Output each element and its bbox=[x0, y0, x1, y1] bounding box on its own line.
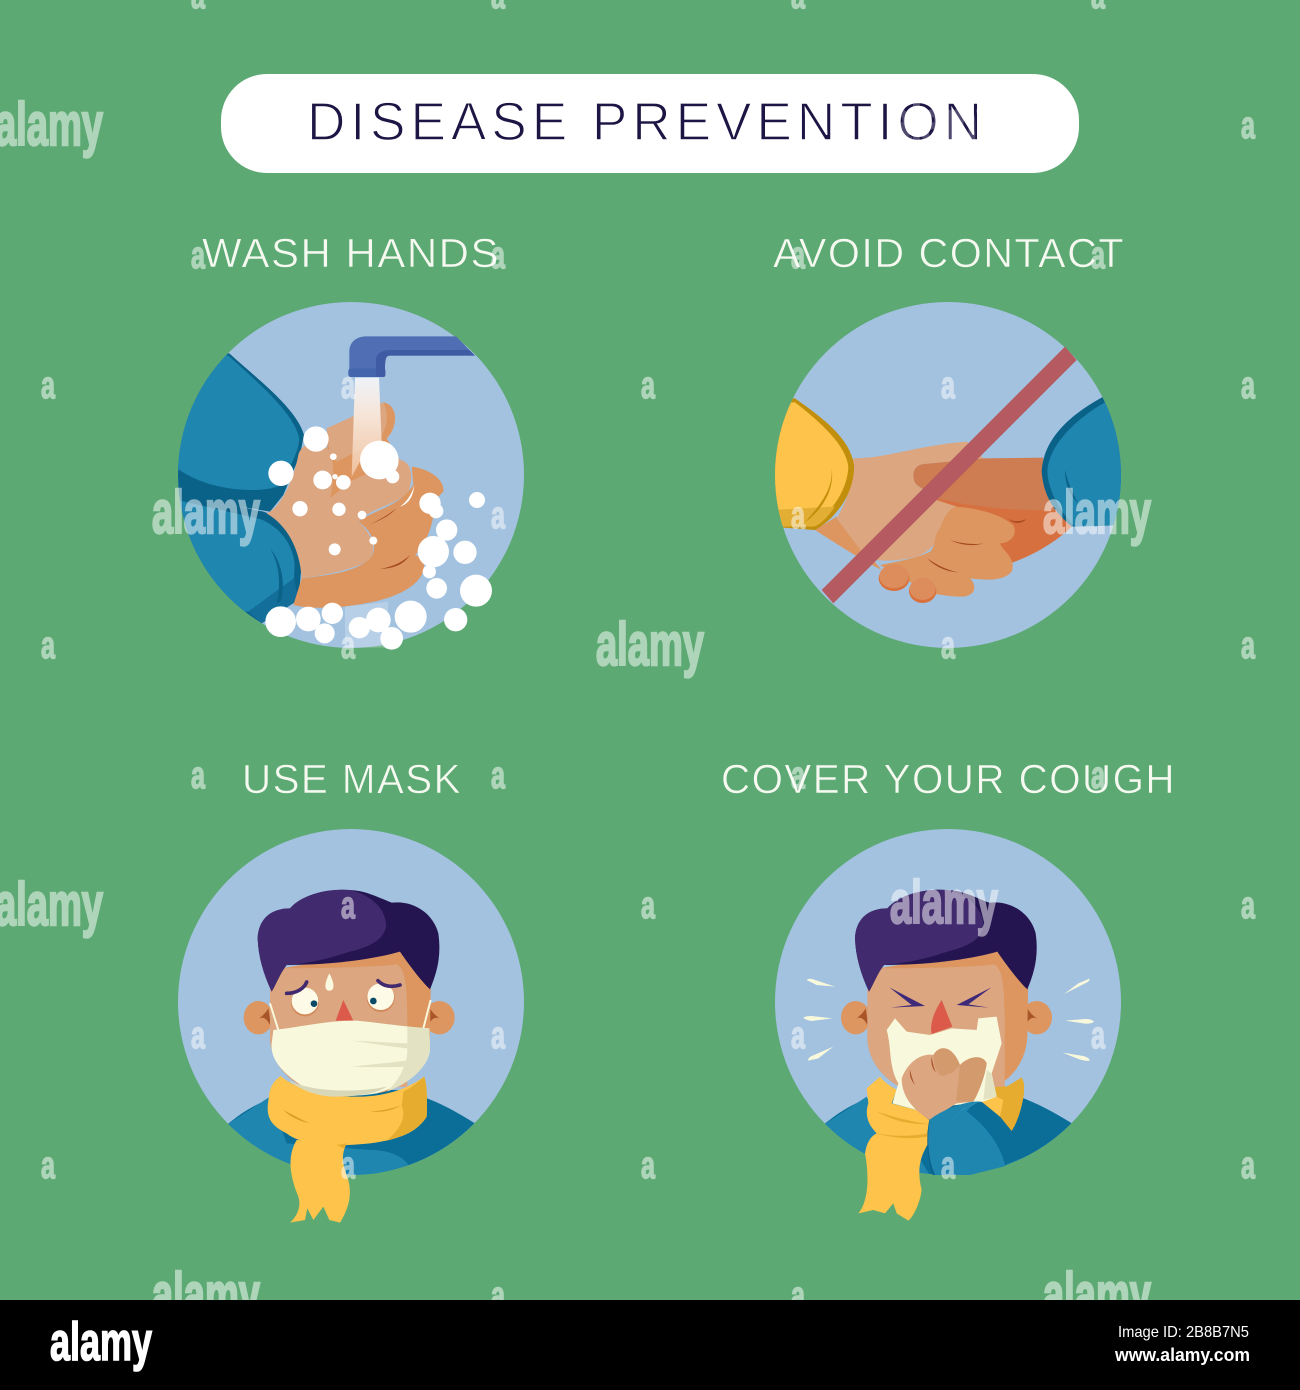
watermark: a bbox=[491, 1275, 506, 1317]
hair bbox=[258, 890, 439, 992]
ears bbox=[244, 1001, 455, 1034]
watermark: a bbox=[491, 495, 506, 537]
watermark: a bbox=[941, 1145, 956, 1187]
watermark: a bbox=[1241, 1145, 1256, 1187]
tissue bbox=[887, 1017, 1002, 1110]
watermark: a bbox=[791, 755, 806, 797]
watermark: a bbox=[41, 625, 56, 667]
watermark: a bbox=[1241, 105, 1256, 147]
hands bbox=[267, 402, 443, 608]
fist bbox=[902, 1048, 987, 1120]
watermark: a bbox=[41, 1145, 56, 1187]
watermark: a bbox=[491, 1015, 506, 1057]
watermark: alamy bbox=[152, 479, 260, 546]
nose bbox=[931, 1000, 952, 1034]
watermark: a bbox=[791, 1015, 806, 1057]
hand: right person bbox=[913, 458, 1072, 578]
watermark: alamy bbox=[0, 871, 103, 938]
heading: cover your cough: COVER YOUR COUGH bbox=[721, 756, 1176, 802]
watermark: a bbox=[191, 235, 206, 277]
body bbox=[825, 1092, 1072, 1174]
watermark: a bbox=[1241, 885, 1256, 927]
scarf bbox=[858, 1077, 1024, 1221]
watermark: a bbox=[341, 885, 356, 927]
ears bbox=[841, 1001, 1052, 1034]
title pill bbox=[221, 74, 1079, 173]
watermark: a bbox=[641, 1145, 656, 1187]
watermark: a bbox=[341, 365, 356, 407]
watermark: alamy bbox=[1043, 1261, 1151, 1328]
watermark: a bbox=[191, 755, 206, 797]
prohibition bar bbox=[822, 347, 1077, 603]
watermark: a bbox=[941, 365, 956, 407]
worried eyes and sweat drop bbox=[287, 973, 400, 1016]
watermark: a bbox=[491, 755, 506, 797]
watermark: a bbox=[191, 1015, 206, 1057]
footer bar: alamy bbox=[50, 1312, 152, 1372]
footer bar: Image ID: 2B8B7N5 bbox=[1118, 1324, 1249, 1341]
watermark: alamy bbox=[0, 91, 103, 158]
footer bar bbox=[0, 1300, 1300, 1390]
soap bubbles bbox=[265, 426, 492, 650]
watermark: a bbox=[791, 1275, 806, 1317]
watermark: a bbox=[341, 1145, 356, 1187]
tap bbox=[348, 336, 475, 377]
head bbox=[867, 948, 1028, 1093]
watermark: a bbox=[641, 365, 656, 407]
sneeze lines bbox=[803, 979, 1094, 1061]
watermark: a bbox=[641, 885, 656, 927]
footer bar: www.alamy.com bbox=[1114, 1345, 1250, 1365]
title pill: DISEASE PREVENTION bbox=[307, 92, 987, 152]
head bbox=[270, 948, 431, 1093]
watermark: alamy bbox=[152, 1261, 260, 1328]
watermark: a bbox=[1241, 365, 1256, 407]
face mask bbox=[270, 1000, 431, 1097]
body bbox=[228, 1090, 474, 1175]
watermark: a bbox=[941, 625, 956, 667]
hand: left person bbox=[837, 442, 1027, 603]
water stream bbox=[345, 378, 388, 648]
hair bbox=[855, 890, 1037, 992]
watermark: alamy bbox=[1043, 479, 1151, 546]
watermark: alamy bbox=[890, 869, 998, 936]
panel: avoid contact illustration bbox=[770, 302, 1127, 648]
heading: avoid contact: AVOID CONTACT bbox=[773, 230, 1125, 276]
sleeve: yellow bbox=[770, 398, 854, 530]
panel: wash hands illustration bbox=[170, 302, 524, 650]
scarf bbox=[268, 1076, 427, 1223]
watermark: a bbox=[1091, 235, 1106, 277]
sleeve: blue bbox=[1042, 397, 1127, 527]
sleeve bbox=[927, 1101, 1025, 1175]
watermark: a bbox=[41, 365, 56, 407]
squinting eyes bbox=[889, 987, 991, 1008]
watermark: a bbox=[791, 495, 806, 537]
watermark: a bbox=[1091, 1015, 1106, 1057]
nose bbox=[336, 1000, 353, 1021]
panel: use mask illustration bbox=[178, 829, 524, 1223]
heading: wash hands: WASH HANDS bbox=[202, 230, 500, 276]
watermark: a bbox=[341, 625, 356, 667]
watermark: a bbox=[491, 235, 506, 277]
watermark: alamy bbox=[890, 89, 998, 156]
panel: cover your cough illustration bbox=[775, 829, 1121, 1221]
watermark: a bbox=[1091, 755, 1106, 797]
heading: use mask: USE MASK bbox=[242, 756, 462, 802]
watermark: a bbox=[791, 235, 806, 277]
watermark: alamy bbox=[596, 611, 704, 678]
watermark: a bbox=[1241, 625, 1256, 667]
